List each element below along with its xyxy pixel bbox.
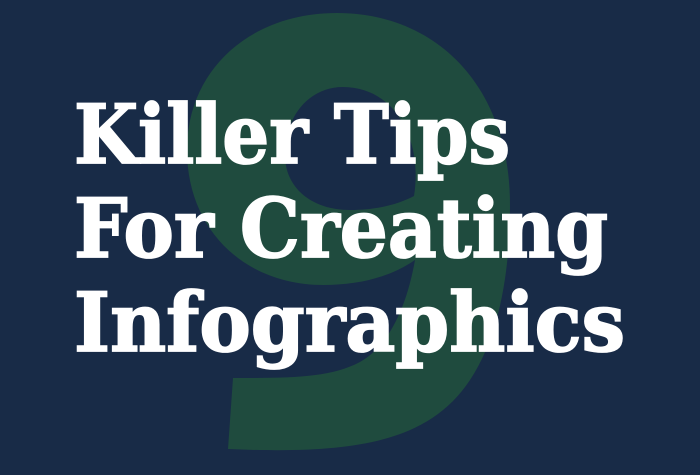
title <box>74 88 625 371</box>
title: Killer Tips <box>74 88 510 183</box>
title: For Creating <box>74 182 608 277</box>
title: Infographics <box>74 276 625 371</box>
large background numeral 9 <box>187 13 510 450</box>
